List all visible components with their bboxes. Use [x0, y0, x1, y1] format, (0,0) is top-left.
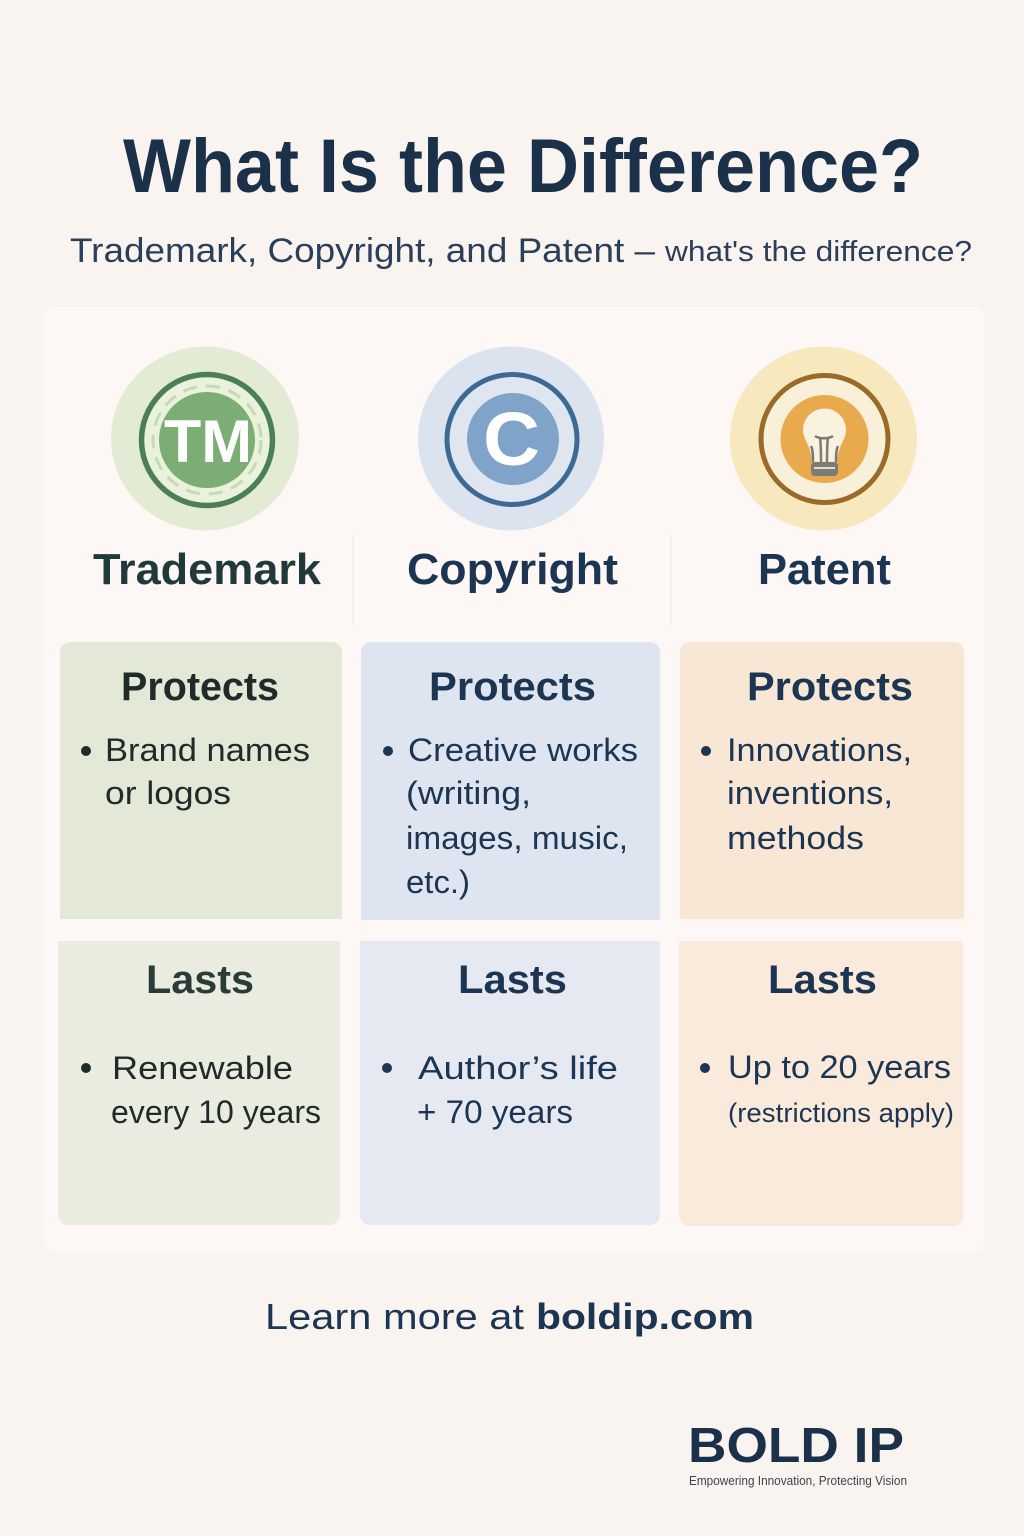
card: patent protects [680, 642, 964, 919]
card: trademark protects: Protects [121, 665, 279, 709]
card: trademark lasts [58, 941, 340, 1225]
call to action: Learn more at [265, 1296, 524, 1337]
icon: copyright: C [483, 397, 540, 481]
icon: trademark: TM [164, 408, 252, 475]
icon: patent lightbulb [730, 346, 917, 530]
heading: trademark: Trademark [93, 545, 322, 594]
card: copyright protects: images, music, [406, 820, 628, 856]
heading: patent: Patent [758, 545, 891, 594]
card: copyright lasts: Lasts [458, 958, 567, 1002]
card: trademark lasts: Lasts [146, 958, 254, 1002]
card: trademark protects: Brand names [105, 732, 310, 768]
icon: trademark [111, 346, 299, 530]
card: copyright protects: etc.) [406, 864, 470, 900]
column: trademark [58, 346, 342, 1225]
logo: Bold IP: BOLD IP [688, 1419, 904, 1473]
card: copyright lasts: Author’s life [418, 1050, 618, 1086]
card: patent lasts: Up to 20 years [728, 1049, 951, 1085]
card: patent protects: Protects [747, 665, 913, 709]
card: patent lasts [679, 941, 963, 1226]
card: copyright protects: Creative works [408, 732, 638, 768]
card: patent protects: Innovations, [727, 732, 912, 768]
card: trademark lasts: every 10 years [111, 1094, 321, 1130]
card: patent protects: methods [727, 820, 864, 856]
card: patent lasts: (restrictions apply) [728, 1098, 954, 1128]
call to action [265, 1296, 754, 1337]
heading: copyright: Copyright [407, 545, 618, 594]
card: copyright protects: Protects [429, 665, 596, 709]
subtitle: what's the difference? [664, 236, 972, 268]
subtitle: Trademark, Copyright, and Patent – [70, 232, 655, 270]
column: patent [679, 346, 964, 1226]
card: copyright lasts [360, 941, 660, 1225]
icon: copyright [418, 346, 604, 530]
subtitle [70, 232, 972, 270]
card: trademark lasts: Renewable [112, 1050, 293, 1086]
title: What Is the Difference? [123, 124, 923, 209]
column: copyright [360, 346, 660, 1225]
call to action: boldip.com [536, 1296, 754, 1337]
card: patent protects: inventions, [727, 775, 893, 811]
card: trademark protects: or logos [105, 775, 231, 811]
card: patent lasts: Lasts [768, 958, 877, 1002]
card: copyright protects: (writing, [406, 775, 531, 811]
card: copyright lasts: + 70 years [417, 1094, 573, 1130]
panel: comparison table [44, 307, 984, 1252]
card: trademark protects [60, 642, 342, 919]
logo: Bold IP: Empowering Innovation, Protecting Vision [689, 1474, 907, 1488]
card: copyright protects [361, 642, 660, 920]
